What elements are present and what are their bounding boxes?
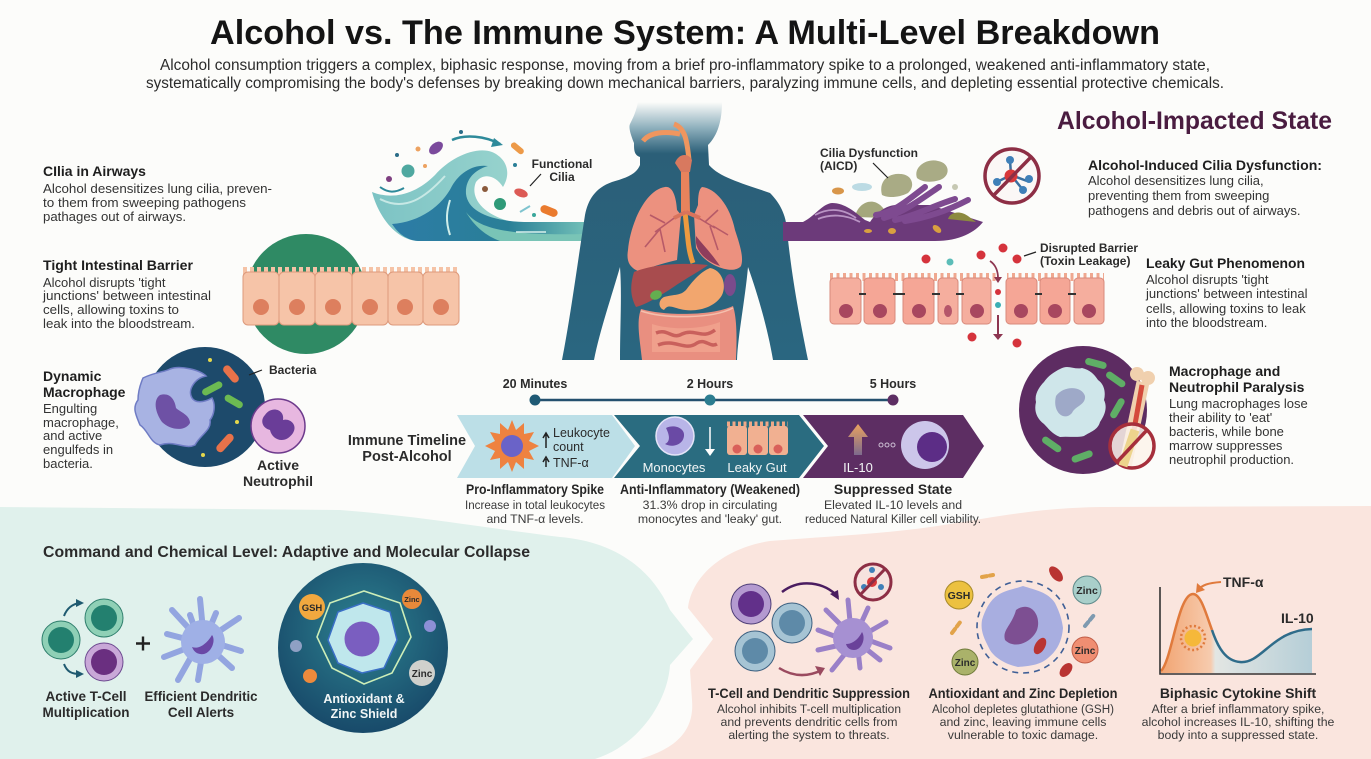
icon: tight intestinal barrier (243, 234, 459, 354)
text block: pro-inflammatory spike: Increase in total leukocytes (465, 498, 605, 512)
text block: anti-inflammatory: monocytes and 'leaky' gut. (638, 512, 782, 526)
icon: active macrophage and neutrophil (135, 347, 305, 467)
text block: leaky gut phenomenon (1145, 255, 1308, 330)
icon: cilia dysfunction (783, 160, 983, 241)
text block: dynamic macrophage: Engulting (43, 401, 97, 416)
chart: biphasic cytokine shift (1160, 574, 1316, 674)
text block: tight intestinal barrier: cells, allowing toxins to (43, 302, 179, 317)
labels: t-cell and dendritic: Multiplication (42, 705, 130, 720)
label: active neutrophil: Neutrophil (243, 473, 313, 489)
text block: antioxidant and zinc depletion: and zinc, leaving immune cells (940, 715, 1106, 729)
label: active neutrophil (243, 457, 313, 489)
illustration: human torso with organs (562, 102, 808, 360)
text block: suppressed state (805, 481, 981, 526)
label: disrupted barrier: (Toxin Leakage) (1040, 254, 1130, 268)
right lung (694, 187, 742, 270)
icon: antioxidant and zinc shield (278, 563, 448, 733)
text block: dynamic macrophage: Macrophage (43, 384, 126, 400)
text block: leaky gut phenomenon: cells, allowing toxins to leak (1146, 301, 1306, 316)
label: cilia dysfunction: (AICD) (820, 159, 857, 173)
icon: antioxidant and zinc shield: Zinc (412, 669, 433, 680)
intestines (639, 306, 737, 360)
text block: macrophage and neutrophil paralysis: bacteris, while bone (1169, 424, 1284, 439)
label: active neutrophil: Active (257, 457, 299, 473)
icon: antioxidant and zinc depletion: GSH (948, 590, 970, 602)
text block: biphasic cytokine shift: body into a suppressed state. (1158, 728, 1318, 742)
text block: leaky gut phenomenon: Alcohol disrupts 'tight (1146, 272, 1269, 287)
text block: macrophage and neutrophil paralysis: Neutrophil Paralysis (1169, 379, 1305, 395)
chevron: anti-inflammatory: Monocytes (643, 460, 706, 475)
text block: dynamic macrophage: and active (43, 428, 102, 443)
timeline axis: 5 Hours (870, 377, 916, 391)
text block: macrophage and neutrophil paralysis: neutrophil production. (1169, 452, 1294, 467)
text block: macrophage and neutrophil paralysis (1169, 363, 1308, 467)
labels: t-cell and dendritic (42, 689, 258, 720)
text block: suppressed state: Elevated IL-10 levels and (824, 498, 962, 512)
text block: cilia in airways: CIlia in Airways (43, 163, 146, 179)
icon: antioxidant and zinc depletion: Zinc (1076, 585, 1098, 597)
text block: tight intestinal barrier: leak into the bloodstream. (43, 316, 195, 331)
icon: antioxidant and zinc shield: Zinc (404, 595, 420, 604)
icon: t-cell multiplication (42, 599, 123, 681)
text block: leaky gut phenomenon: Leaky Gut Phenomenon (1146, 255, 1305, 271)
text block: pro-inflammatory spike: Pro-Inflammatory Spike (466, 481, 604, 497)
text block: cilia in airways: to them from sweeping pathogens (43, 195, 247, 210)
text block: t-cell and dendritic suppression: T-Cell and Dendritic Suppression (708, 685, 910, 701)
labels: t-cell and dendritic: Active T-Cell (45, 689, 127, 704)
text block: biphasic cytokine shift: alcohol increases IL-10, shifting the (1142, 715, 1335, 729)
text block: pro-inflammatory spike: and TNF-α levels. (486, 512, 584, 526)
text block: dynamic macrophage: engulfeds in (43, 442, 113, 457)
subtitle: systematically compromising the body's defenses by breaking down mechanical barriers, paralyzing immune cells, and depleting essential protective chemicals. (146, 75, 1224, 92)
text block: t-cell and dendritic suppression: Alcohol inhibits T-cell multiplication (717, 702, 901, 716)
text block: macrophage and neutrophil paralysis: marrow suppresses (1169, 438, 1283, 453)
text block: anti-inflammatory: Anti-Inflammatory (Weakened) (620, 481, 800, 497)
icon: disrupted barrier (830, 244, 1104, 348)
label: cilia dysfunction: Cilia Dysfunction (820, 146, 918, 160)
text block: suppressed state: reduced Natural Killer cell viability. (805, 512, 981, 526)
text block: antioxidant and zinc depletion (928, 685, 1118, 742)
icon: antioxidant and zinc depletion: Zinc (1075, 646, 1096, 657)
text block: tight intestinal barrier: Alcohol disrupts 'tight (43, 275, 166, 290)
text block: t-cell and dendritic suppression: and prevents dendritic cells from (720, 715, 898, 729)
text block: biphasic cytokine shift: Biphasic Cytokine Shift (1160, 685, 1317, 701)
text block: alcohol-induced cilia dysfunction: Alcohol-Induced Cilia Dysfunction: (1088, 157, 1322, 173)
icon: no molecule sign (985, 149, 1039, 203)
label: functional cilia: Cilia (549, 170, 575, 184)
liver (631, 264, 708, 307)
labels: t-cell and dendritic: Cell Alerts (168, 705, 234, 720)
text block: leaky gut phenomenon: junctions' between intestinal (1145, 286, 1308, 301)
icon: t-cell and dendritic suppression (731, 564, 891, 676)
text block: tight intestinal barrier (42, 257, 211, 331)
text block: cilia in airways: Alcohol desensitizes lung cilia, preven- (43, 181, 272, 196)
body silhouette (562, 102, 808, 360)
subtitle: Alcohol consumption triggers a complex, biphasic response, moving from a brief pro-inflammatory spike to a prolonged, weakened anti-inflammatory state, (160, 57, 1210, 74)
panel: mint command level background (0, 507, 693, 759)
text block: alcohol-induced cilia dysfunction: preventing them from sweeping (1088, 188, 1269, 203)
label: immune timeline: Immune Timeline (348, 433, 466, 449)
icon: plus (136, 636, 150, 650)
text block: antioxidant and zinc depletion: Alcohol depletes glutathione (GSH) (932, 702, 1114, 716)
text block: t-cell and dendritic suppression: alerting the system to threats. (728, 728, 890, 742)
text block: alcohol-induced cilia dysfunction: pathogens and debris out of airways. (1088, 203, 1300, 218)
label: disrupted barrier: Disrupted Barrier (1040, 241, 1138, 255)
text block: anti-inflammatory: 31.3% drop in circulating (643, 498, 777, 512)
text block: tight intestinal barrier: Tight Intestinal Barrier (43, 257, 194, 273)
chevron: pro-inflammatory spike: TNF-α (553, 456, 589, 470)
icon: dendritic cell (164, 599, 241, 680)
text block: dynamic macrophage: bacteria. (43, 456, 93, 471)
chevron: pro-inflammatory spike (457, 415, 635, 478)
title: Alcohol vs. The Immune System: A Multi-Level Breakdown (210, 14, 1160, 52)
text block: dynamic macrophage: Dynamic (43, 368, 102, 384)
text block: dynamic macrophage (43, 368, 126, 471)
chevron: pro-inflammatory spike: count (553, 440, 584, 454)
icon: antioxidant and zinc depletion (945, 564, 1101, 679)
panel: peach suppressed level background (640, 506, 1371, 759)
text block: cilia in airways (43, 163, 272, 224)
label: immune timeline: Post-Alcohol (362, 449, 452, 465)
labels: t-cell and dendritic: Efficient Dendritic (144, 689, 258, 704)
text block: macrophage and neutrophil paralysis: Lung macrophages lose (1169, 396, 1308, 411)
text block: macrophage and neutrophil paralysis: Macrophage and (1169, 363, 1280, 379)
label: immune timeline (348, 433, 466, 465)
left lung (628, 187, 681, 272)
timeline axis: 2 Hours (687, 377, 733, 391)
text block: biphasic cytokine shift: After a brief inflammatory spike, (1152, 702, 1324, 716)
text block: macrophage and neutrophil paralysis: their ability to 'eat' (1169, 410, 1272, 425)
chart: biphasic cytokine shift: IL-10 (1281, 610, 1314, 626)
icon: functional cilia wave (372, 130, 586, 241)
text block: pro-inflammatory spike (465, 481, 605, 526)
text block: alcohol-induced cilia dysfunction: Alcohol desensitizes lung cilia, (1088, 173, 1264, 188)
subtitle (146, 57, 1224, 92)
airway and oesophagus (643, 124, 689, 160)
chevron: suppressed state (803, 415, 984, 478)
text block: leaky gut phenomenon: into the bloodstream. (1146, 315, 1267, 330)
icon: paralysed macrophage and bone (1019, 346, 1155, 474)
label: bacteria: Bacteria (269, 363, 317, 377)
chevron: suppressed state: IL-10 (843, 460, 873, 475)
label: disrupted barrier (1040, 241, 1138, 268)
icon: antioxidant and zinc shield: Zinc Shield (331, 707, 397, 721)
text block: antioxidant and zinc depletion: Antioxidant and Zinc Depletion (928, 685, 1118, 701)
chevron: pro-inflammatory spike: Leukocyte (553, 426, 610, 440)
label: functional cilia: Functional (532, 157, 592, 171)
text block: suppressed state: Suppressed State (834, 481, 952, 497)
text block: cilia in airways: pathages out of airways. (43, 209, 186, 224)
text block: t-cell and dendritic suppression (708, 685, 910, 742)
gallbladder and spleen (649, 289, 663, 301)
stomach (660, 268, 724, 310)
label: cilia dysfunction (820, 146, 918, 173)
text block: biphasic cytokine shift (1142, 685, 1335, 742)
chevron: anti-inflammatory (614, 415, 824, 478)
timeline axis: 20 Minutes (503, 377, 567, 391)
chart: biphasic cytokine shift: TNF-α (1223, 574, 1264, 590)
icon: antioxidant and zinc shield: GSH (302, 603, 322, 614)
text block: anti-inflammatory (620, 481, 800, 526)
text block: antioxidant and zinc depletion: vulnerable to toxic damage. (948, 728, 1098, 742)
icon: antioxidant and zinc depletion: Zinc (955, 658, 976, 669)
text block: tight intestinal barrier: junctions' between intestinal (42, 288, 211, 303)
label: functional cilia (532, 157, 592, 184)
text block: dynamic macrophage: macrophage, (43, 415, 119, 430)
chevron: anti-inflammatory: Leaky Gut (727, 460, 787, 475)
heading: alcohol-impacted state: Alcohol-Impacted State (1057, 107, 1332, 135)
timeline axis (503, 377, 916, 406)
heading: command and chemical level: Command and Chemical Level: Adaptive and Molecular Collapse (43, 544, 530, 561)
text block: alcohol-induced cilia dysfunction (1088, 157, 1322, 218)
icon: antioxidant and zinc shield: Antioxidant & (323, 692, 405, 706)
